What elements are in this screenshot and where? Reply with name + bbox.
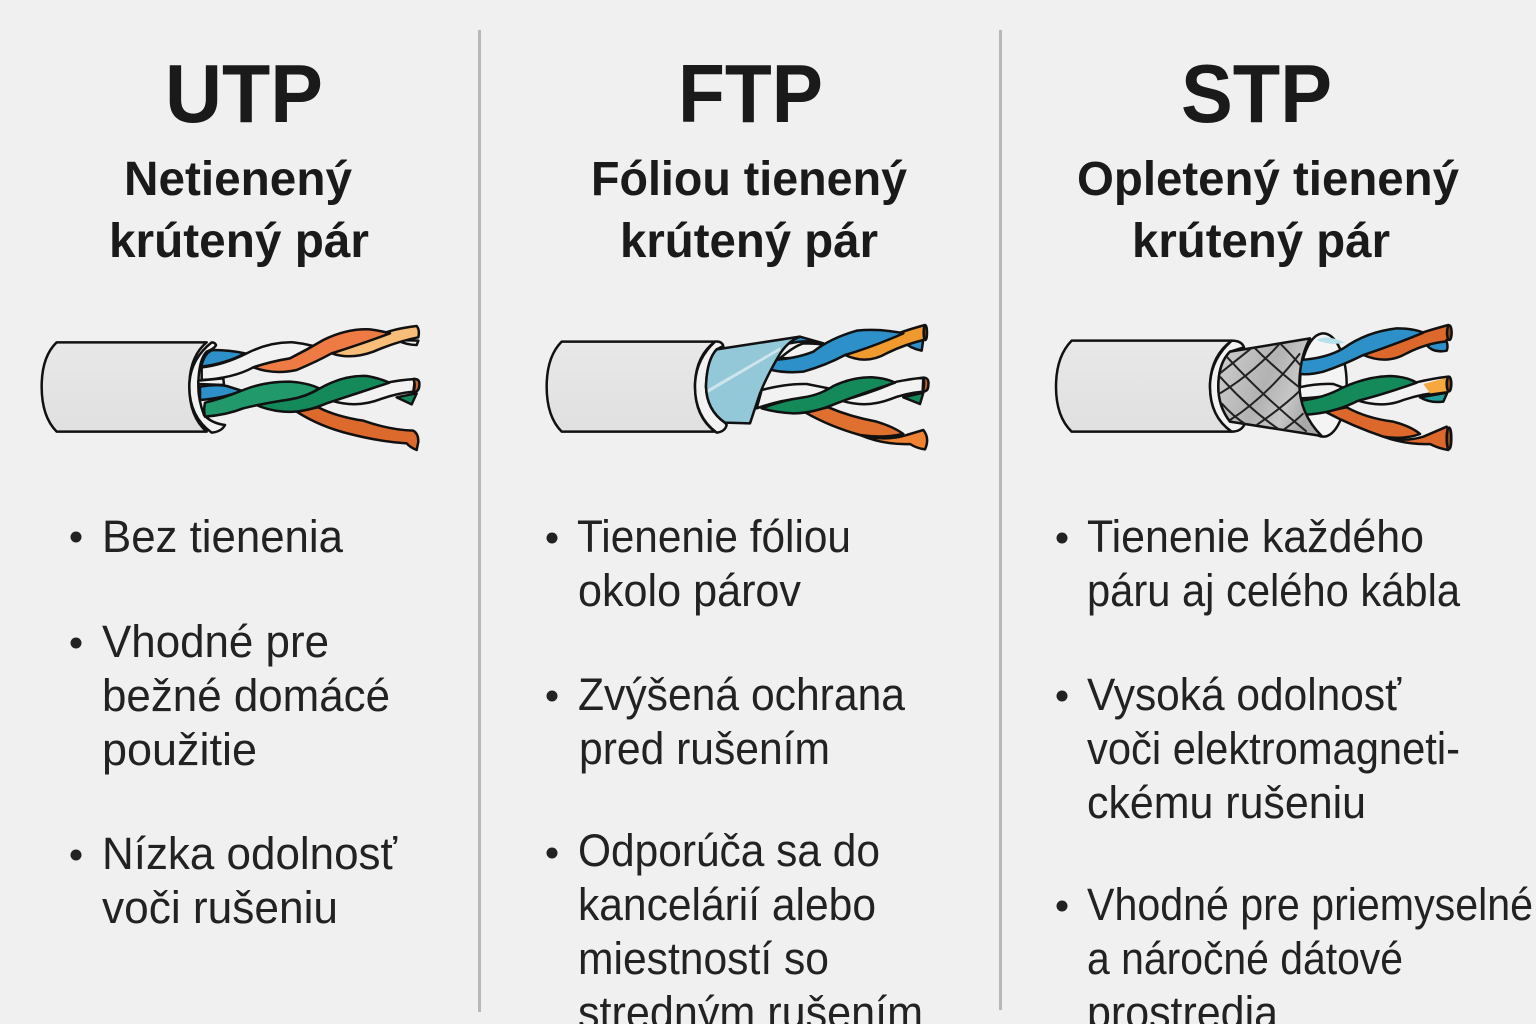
- bullet 1: [546, 511, 851, 616]
- bullet 2: pred rušením: [579, 723, 830, 774]
- bullet 3: [546, 825, 923, 1024]
- bullet list: STP: [1056, 511, 1533, 1024]
- bullet list: UTP: [70, 511, 398, 933]
- bullet 2: Zvýšená ochrana: [578, 669, 906, 720]
- bullet 2: Vysoká odolnosť: [1087, 669, 1402, 720]
- subheading: FTP: krútený pár: [620, 215, 878, 268]
- icon: FTP cable: [547, 325, 928, 449]
- bullet list: FTP: [546, 511, 923, 1024]
- bullet 2: [70, 616, 390, 775]
- subheading: UTP: krútený pár: [109, 215, 369, 268]
- bullet 1: Tienenie fóliou: [577, 511, 851, 562]
- bullet 1: páru aj celého kábla: [1087, 565, 1461, 616]
- panel: STP: [1056, 47, 1533, 1024]
- subheading: STP: krútený pár: [1132, 215, 1390, 268]
- bullet 3: Nízka odolnosť: [102, 828, 398, 879]
- bullet 3: Odporúča sa do: [578, 825, 880, 876]
- icon: STP cable: [1056, 325, 1452, 450]
- bullet 2: Vhodné pre: [102, 616, 329, 667]
- subheading: UTP: [109, 153, 369, 268]
- bullet 2: [546, 669, 906, 774]
- bullet 1: okolo párov: [578, 565, 801, 616]
- bullet 2: bežné domácé: [102, 670, 390, 721]
- icon: UTP cable: [42, 326, 419, 450]
- heading: FTP: FTP: [678, 47, 823, 140]
- bullet 3: [1056, 879, 1533, 1024]
- bullet 1: [1056, 511, 1461, 616]
- bullet 3: a náročné dátové: [1087, 933, 1403, 984]
- bullet 3: [70, 828, 398, 933]
- subheading: FTP: Fóliou tienený: [591, 153, 907, 206]
- subheading: STP: Opletený tienený: [1077, 153, 1459, 206]
- panel: FTP: [546, 47, 928, 1024]
- bullet 1: Tienenie každého: [1087, 511, 1424, 562]
- heading: UTP: UTP: [165, 47, 323, 140]
- subheading: UTP: Netienený: [124, 153, 352, 206]
- bullet 3: kancelárií alebo: [578, 879, 876, 930]
- bullet 2: [1056, 669, 1460, 828]
- subheading: STP: [1077, 153, 1459, 268]
- bullet 3: voči rušeniu: [102, 882, 338, 933]
- subheading: FTP: [591, 153, 907, 268]
- panel: UTP: [42, 47, 419, 933]
- bullet 2: voči elektromagneti-: [1087, 723, 1460, 774]
- bullet 2: ckému rušeniu: [1087, 777, 1366, 828]
- bullet 3: miestností so: [578, 933, 829, 984]
- bullet 1: Bez tienenia: [102, 511, 344, 562]
- heading: STP: STP: [1181, 47, 1332, 140]
- bullet 2: použitie: [102, 724, 257, 775]
